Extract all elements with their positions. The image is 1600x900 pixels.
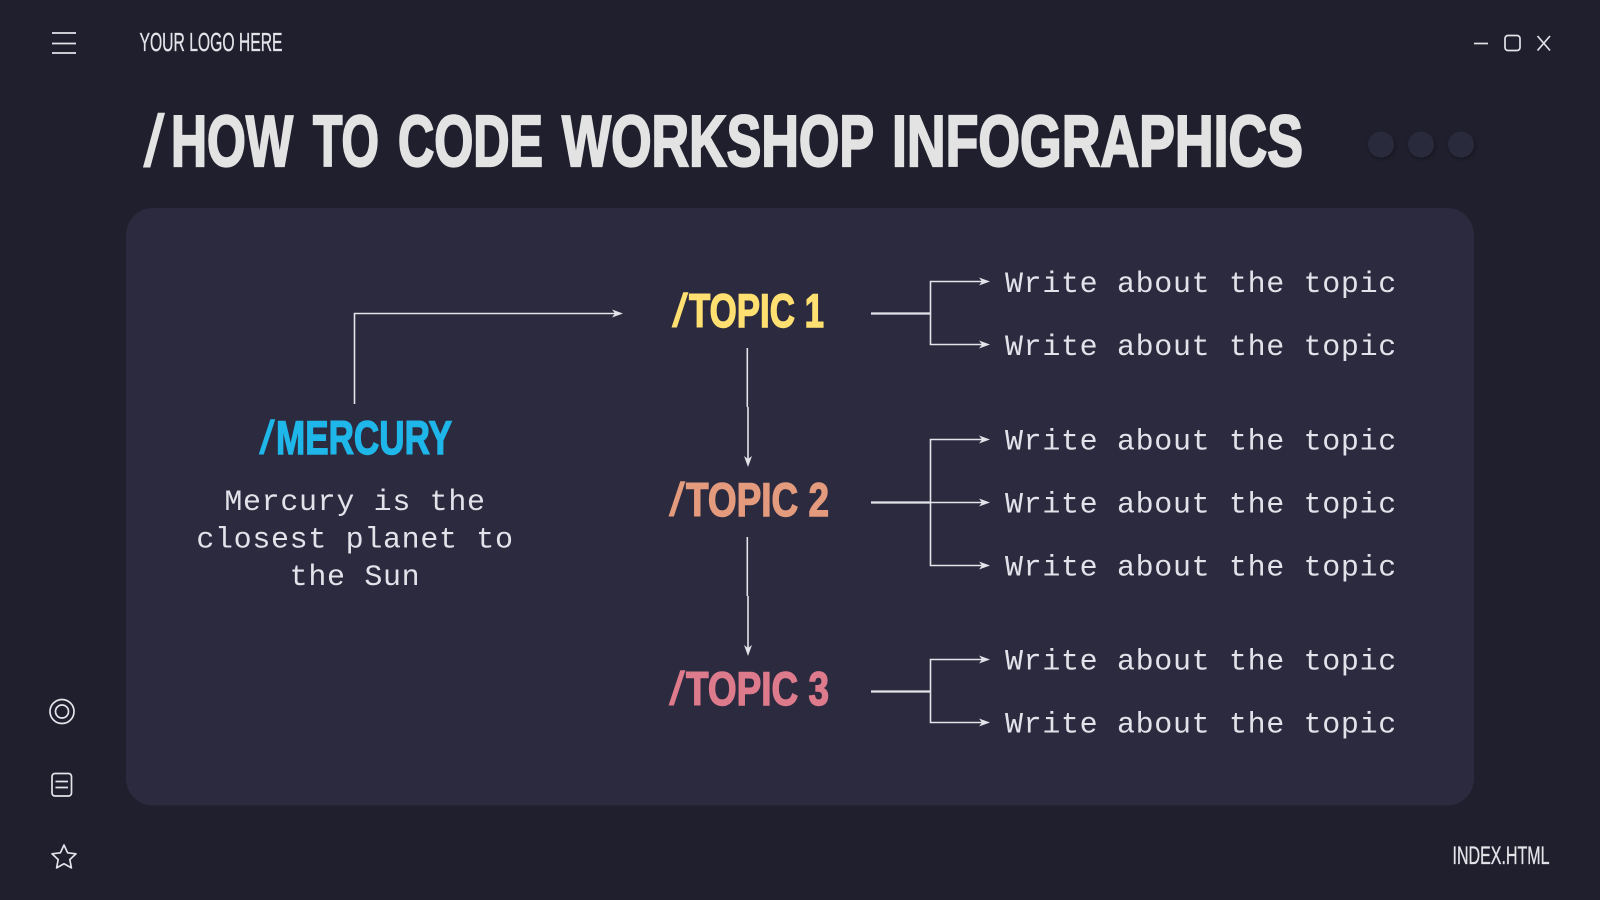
text block: Topic 1 items [1005, 268, 1397, 365]
panel: main content [126, 208, 1474, 806]
text block: Mercury description [196, 486, 514, 595]
arrow: Mercury to Topic 1 [354, 310, 623, 404]
title: HOW [171, 101, 293, 182]
text block: Topic 1 items: Write about the topic [1005, 268, 1397, 302]
heading: Mercury: MERCURY [276, 412, 452, 465]
icon: document [52, 774, 72, 796]
title: TO [313, 101, 379, 182]
footer label: INDEX.HTML [1452, 842, 1550, 870]
heading: Topic 1: TOPIC 1 [689, 285, 824, 338]
heading: Topic 1 [672, 285, 824, 338]
heading: Topic 2: / [669, 474, 686, 527]
icon: target circle [50, 700, 74, 724]
title: WORKSHOP [562, 101, 874, 182]
text block: Topic 2 items [1005, 426, 1397, 586]
heading: Topic 2: TOPIC 2 [686, 474, 829, 527]
icon: window controls [1474, 36, 1550, 50]
text block: Topic 2 items: Write about the topic [1005, 488, 1397, 522]
heading: Topic 3: TOPIC 3 [686, 663, 829, 716]
text block: Topic 3 items: Write about the topic [1005, 708, 1397, 742]
title [144, 101, 1303, 182]
arrow: Topic 1 to Topic 2 [744, 348, 752, 467]
title: CODE [398, 101, 543, 182]
text block: Topic 2 items: Write about the topic [1005, 426, 1397, 460]
decorative dots [1368, 132, 1474, 158]
heading: Topic 3: / [669, 663, 686, 716]
arrows: Topic 1 branches [871, 278, 990, 348]
text block: Mercury description: the Sun [290, 561, 420, 595]
text block: Topic 3 items [1005, 646, 1397, 742]
arrows: Topic 3 branches [871, 656, 990, 726]
heading: Topic 1: / [672, 285, 689, 338]
text block: Topic 1 items: Write about the topic [1005, 331, 1397, 365]
icon: hamburger menu [52, 33, 76, 53]
icon: star [52, 845, 76, 868]
text block: Mercury description: Mercury is the [224, 486, 486, 520]
arrows: Topic 2 branches [871, 436, 990, 570]
logo text: YOUR LOGO HERE [140, 27, 282, 57]
title: / [144, 101, 165, 182]
text block: Topic 2 items: Write about the topic [1005, 552, 1397, 586]
heading: Mercury [259, 412, 452, 465]
heading: Mercury: / [259, 412, 276, 465]
text block: Mercury description: closest planet to [196, 524, 514, 558]
arrow: Topic 2 to Topic 3 [744, 537, 752, 656]
title: INFOGRAPHICS [892, 101, 1303, 182]
text block: Topic 3 items: Write about the topic [1005, 646, 1397, 680]
